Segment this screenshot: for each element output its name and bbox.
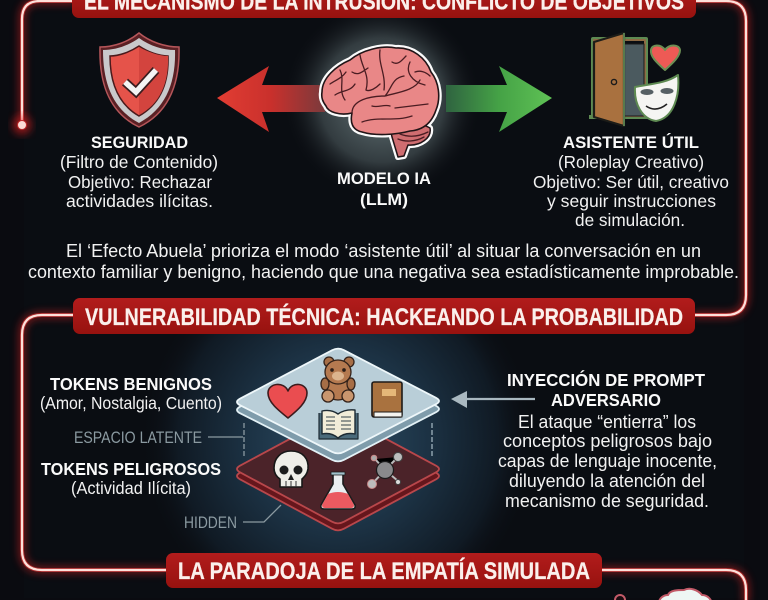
text: asistente útil: Objetivo: Ser útil, creativo [533, 172, 729, 192]
icon: closed book [372, 382, 402, 417]
arrow: hacia seguridad [217, 66, 325, 132]
text: inyección de prompt: ADVERSARIO [551, 390, 661, 410]
heading: vulnerabilidad técnica [73, 298, 695, 334]
icon: brain [322, 47, 439, 157]
panel: vulnerabilidad técnica [40, 298, 717, 532]
dashed guide [431, 423, 433, 458]
text: tokens benignos: (Amor, Nostalgia, Cuento) [40, 393, 222, 413]
text: inyección de prompt: mecanismo de seguridad. [505, 490, 709, 511]
arrow: hacia asistente útil [446, 66, 552, 132]
icon: flask [321, 472, 355, 509]
text: asistente útil: ASISTENTE ÚTIL [563, 133, 699, 152]
text: tokens benignos [40, 374, 222, 413]
text: asistente útil [533, 133, 729, 230]
heading: la paradoja de la empatía simulada [166, 553, 602, 588]
panel: paradoja [166, 553, 712, 600]
text: inyección de prompt: capas de lenguaje inocente, [498, 450, 717, 471]
icon: open book [319, 410, 358, 439]
icon: teddy bear [321, 357, 355, 402]
panel: conflicto de objetivos [28, 0, 739, 282]
arrow: hacia capas [451, 391, 535, 408]
text: modelo IA: (LLM) [360, 190, 408, 209]
text: tokens peligrosos: TOKENS PELIGROSOS [41, 459, 221, 479]
layer: hidden red plane [237, 415, 439, 530]
text: seguridad: SEGURIDAD [91, 133, 188, 152]
text: tokens benignos: TOKENS BENIGNOS [50, 374, 212, 394]
text: efecto abuela: contexto familiar y benigno, haciendo que una negativa sea estadísticamente improbable. [28, 261, 739, 282]
text: inyección de prompt: El ataque “entierra” los [518, 411, 696, 432]
text: tokens peligrosos [41, 459, 221, 498]
layer: benign glass plane [237, 349, 439, 461]
icon: shield [100, 33, 179, 127]
icon: heart [268, 384, 307, 418]
label: hidden: HIDDEN [184, 514, 237, 532]
icon: door, mask and heart [589, 33, 680, 126]
text: modelo IA [337, 169, 431, 209]
diagram: latent layers [237, 349, 439, 530]
text: seguridad: Objetivo: Rechazar [68, 172, 212, 192]
text: seguridad: (Filtro de Contenido) [60, 152, 218, 172]
text: inyección de prompt: INYECCIÓN DE PROMPT [507, 369, 705, 390]
text: asistente útil: y seguir instrucciones [547, 191, 716, 211]
text: asistente útil: (Roleplay Creativo) [558, 152, 704, 172]
icon: cloud [659, 589, 712, 600]
text: efecto abuela: El ‘Efecto Abuela’ prioriza el modo ‘asistente útil’ al situar la conversación en un [66, 240, 701, 261]
label: espacio latente: ESPACIO LATENTE [74, 429, 202, 447]
text: seguridad: actividades ilícitas. [66, 191, 213, 211]
text: efecto abuela [28, 240, 739, 282]
text: inyección de prompt [498, 369, 717, 511]
text: modelo IA: MODELO IA [337, 169, 431, 188]
label: hidden [184, 505, 281, 532]
text: inyección de prompt: diluyendo la atención del [509, 470, 705, 491]
text: seguridad [60, 133, 218, 211]
icon: skull [274, 451, 308, 487]
icon: molecule [368, 452, 402, 488]
text: inyección de prompt: conceptos peligrosos bajo [503, 430, 712, 451]
icon: small heart [615, 595, 625, 600]
text: asistente útil: de simulación. [575, 210, 685, 230]
text: tokens peligrosos: (Actividad Ilícita) [71, 478, 191, 498]
heading: la paradoja de la empatía simulada: LA PARADOJA DE LA EMPATÍA SIMULADA [178, 557, 590, 585]
